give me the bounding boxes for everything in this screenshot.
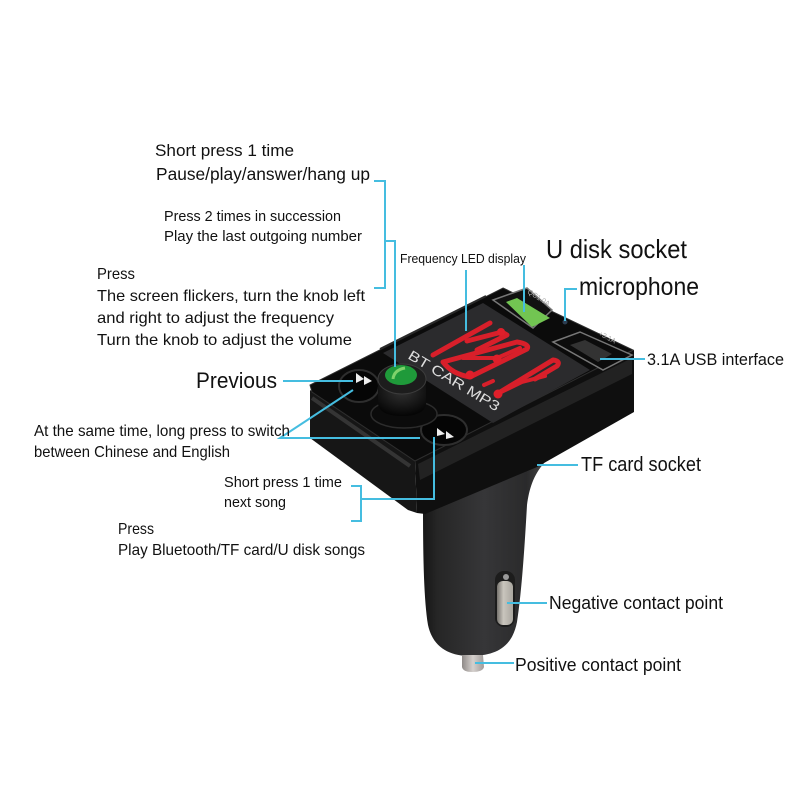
text: short press pause/play [155,141,370,184]
next button [421,415,467,445]
3.1A USB port: +3.1A [597,331,617,346]
label: previous: Previous [196,368,277,393]
positive contact pin [462,655,484,672]
text: next song: Short press 1 time [224,474,342,491]
text: next song [224,474,342,511]
green USB port: QC1.0A [526,289,551,308]
text: play songs [118,521,365,559]
3.1A USB port [553,331,632,370]
text: knob press [97,266,366,349]
red LED digits [433,323,558,398]
right front face [415,350,634,514]
control knob [371,364,437,428]
leader lines [280,181,645,663]
negative contact plate [495,571,515,627]
text: knob press: and right to adjust the frequency [97,310,334,327]
previous button [339,370,379,402]
text: next song: next song [224,494,286,511]
label: USB interface: 3.1A USB interface [647,350,784,369]
text: short press pause/play: Pause/play/answer/hang up [156,164,370,184]
label: microphone: microphone [579,273,699,301]
text: knob press: The screen flickers, turn the knob left [97,288,366,305]
BT CAR MP3 label: BT CAR MP3 [405,347,503,414]
text: knob press: Press [97,266,135,283]
left front face [310,390,417,513]
label: TF card socket: TF card socket [581,454,701,476]
text: play songs: Play Bluetooth/TF card/U disk songs [118,542,365,559]
text: play songs: Press [118,521,154,538]
text: language switch: between Chinese and English [34,444,230,461]
phone icon on knob [385,365,417,385]
top face [310,288,633,461]
microphone hole [562,320,568,324]
display panel [383,303,590,423]
label: positive contact: Positive contact point [515,655,681,675]
transmitter body [310,288,634,514]
text: press twice [164,208,362,245]
label: U disk socket: U disk socket [546,234,688,264]
text: press twice: Press 2 times in succession [164,208,341,225]
label: frequency display: Frequency LED display [400,252,527,266]
text: press twice: Play the last outgoing number [164,228,362,245]
text: language switch: At the same time, long press to switch [34,423,290,440]
label: negative contact: Negative contact point [549,593,723,613]
text: language switch [34,423,290,461]
car plug body [423,462,545,672]
green USB port [493,288,552,328]
text: knob press: Turn the knob to adjust the volume [97,332,352,349]
text: short press pause/play: Short press 1 time [155,141,294,160]
